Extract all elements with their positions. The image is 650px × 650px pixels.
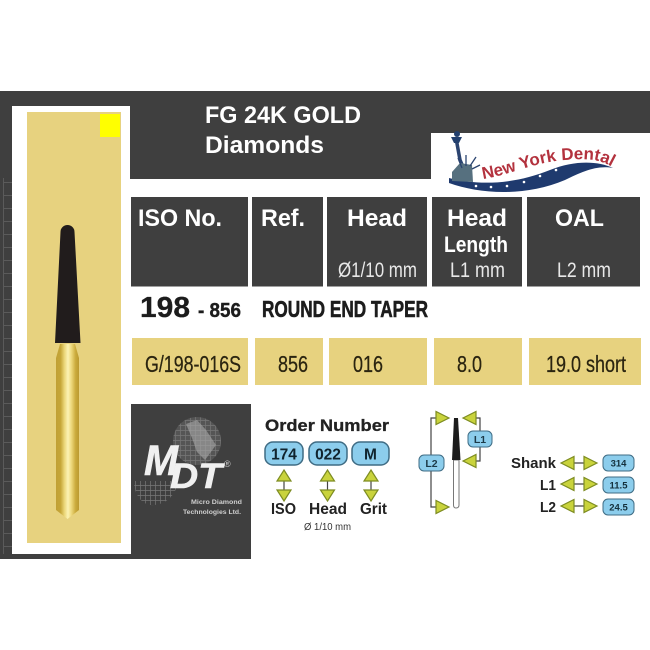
table value cells: 19.0 short bbox=[546, 351, 626, 377]
MDT wordmark: DT bbox=[170, 457, 225, 496]
table header cells: Ø1/10 mm bbox=[338, 259, 417, 282]
table header cells bbox=[131, 197, 640, 286]
icon: lower globe grid bbox=[134, 481, 178, 505]
product name line: - 856 bbox=[198, 300, 241, 322]
order number key: ISO bbox=[271, 501, 296, 518]
bur dimension diagram: L1 bbox=[474, 434, 486, 446]
title: Diamonds bbox=[205, 132, 324, 159]
panel: MDT logo bbox=[131, 404, 251, 559]
title: FG 24K GOLD bbox=[205, 102, 361, 129]
shank and length key: 314 bbox=[611, 458, 627, 470]
title bbox=[205, 102, 361, 159]
table header cells: L1 mm bbox=[450, 259, 505, 282]
logo: New York Dental bbox=[449, 131, 616, 192]
shank and length key: L1 bbox=[540, 477, 556, 494]
order number key bbox=[265, 416, 389, 533]
MDT wordmark: M bbox=[144, 437, 179, 485]
table header cells: L2 mm bbox=[557, 259, 611, 282]
icon: gold shank bbox=[56, 344, 79, 519]
MDT wordmark bbox=[144, 437, 225, 496]
logo: New York Dental: New York Dental bbox=[482, 148, 616, 179]
dark background frame bbox=[0, 91, 650, 559]
table header cells: ISO No. bbox=[138, 205, 222, 232]
table value cells: 856 bbox=[278, 351, 308, 377]
order number key: Ø 1/10 mm bbox=[304, 522, 351, 533]
table value cells: 016 bbox=[353, 351, 383, 377]
table value cells: 8.0 bbox=[457, 351, 482, 377]
panel: MDT logo: Technologies Ltd. bbox=[183, 509, 241, 516]
shank and length key: Shank bbox=[511, 455, 557, 472]
product name line: ROUND END TAPER bbox=[262, 296, 428, 322]
shank and length key: 24.5 bbox=[609, 502, 628, 514]
order number key: Order Number bbox=[265, 416, 389, 435]
table header cells: Length bbox=[444, 232, 508, 257]
product name line bbox=[140, 292, 428, 324]
icon: yellow colour code square bbox=[100, 114, 120, 137]
shank and length key: L2 bbox=[540, 499, 556, 516]
panel: bur image bbox=[12, 106, 130, 554]
bur dimension diagram: L2 bbox=[425, 458, 438, 470]
order number key: M bbox=[364, 446, 377, 464]
table header cells: Head bbox=[347, 205, 407, 232]
icon: globe bbox=[173, 417, 221, 465]
table header cells: Ref. bbox=[261, 205, 305, 232]
panel: MDT logo: ® bbox=[224, 459, 231, 469]
order number key: Grit bbox=[360, 501, 388, 518]
table value cells bbox=[132, 338, 641, 385]
shank and length key bbox=[511, 455, 634, 516]
table header cells: Head bbox=[447, 205, 507, 232]
icon: diamond head bbox=[55, 225, 80, 343]
table value cells: G/198-016S bbox=[145, 351, 241, 377]
order number key: 022 bbox=[315, 446, 341, 464]
table header cells: OAL bbox=[555, 205, 604, 232]
order number key: 174 bbox=[271, 446, 297, 464]
product name line: 198 bbox=[140, 292, 190, 324]
order number key: Head bbox=[309, 501, 347, 518]
panel: MDT logo: Micro Diamond bbox=[191, 499, 242, 506]
shank and length key: 11.5 bbox=[610, 480, 628, 492]
bur dimension diagram bbox=[419, 412, 492, 514]
